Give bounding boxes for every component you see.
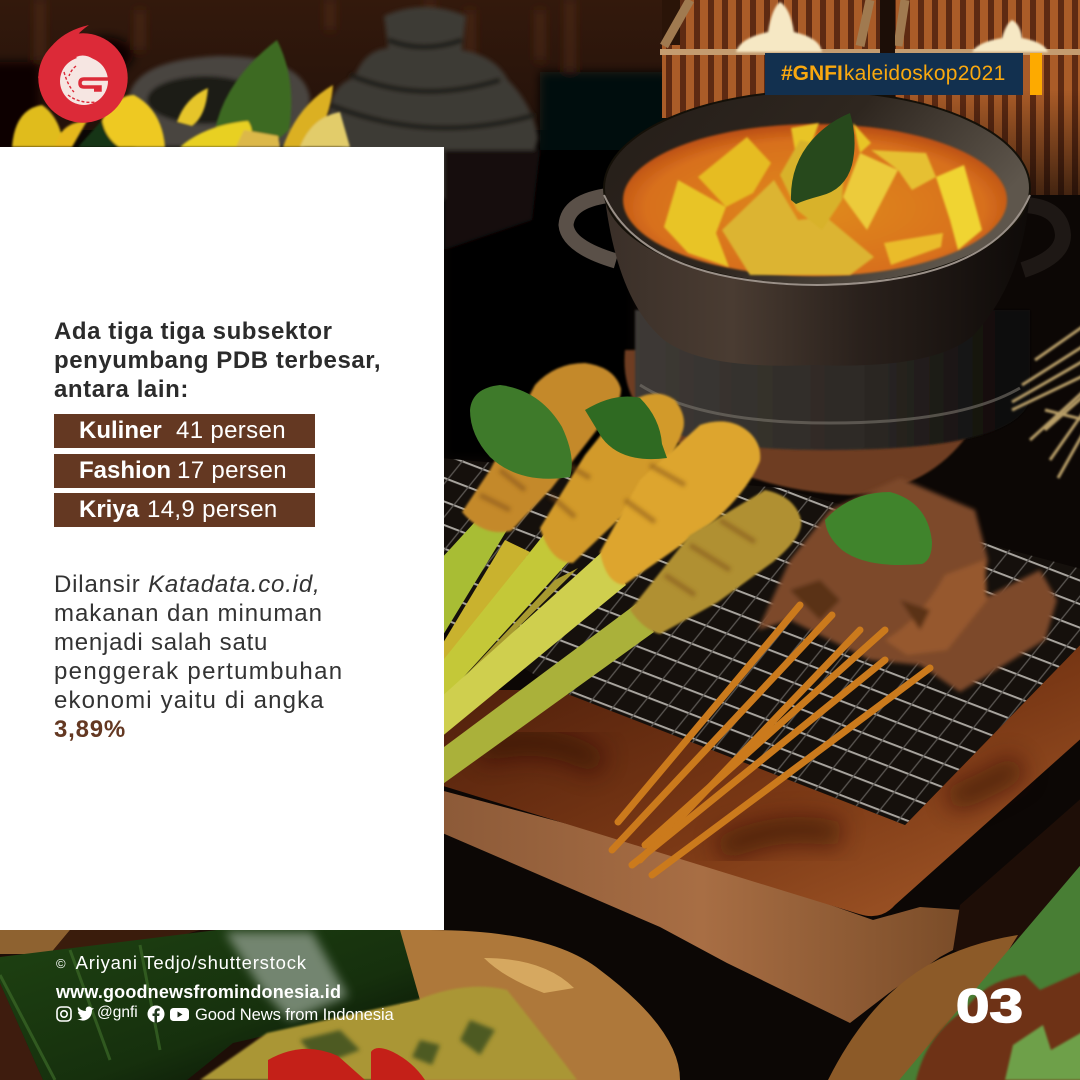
hashtag label	[765, 53, 1023, 95]
social name: Good News from Indonesia	[195, 1005, 394, 1024]
icon: twitter	[77, 1006, 94, 1021]
curry	[623, 124, 1007, 276]
wood slice under burner	[624, 350, 980, 495]
bar: Kuliner 41 persen	[54, 414, 315, 448]
pot rim	[604, 91, 1030, 285]
text block: Katadata paragraph: Dilansir Katadata.co.id,	[54, 571, 320, 598]
text block: Katadata paragraph: ekonomi yaitu di angka	[54, 687, 325, 714]
bar: Kriya 14,9 persen	[54, 493, 315, 527]
text block: Katadata paragraph: menjadi salah satu	[54, 629, 268, 656]
wire rack	[440, 458, 1080, 825]
website url: www.goodnewsfromindonesia.id	[56, 982, 341, 1002]
heading: subsektor intro	[54, 318, 381, 403]
beef satay	[758, 478, 1057, 692]
heading: subsektor intro: Ada tiga tiga subsektor	[54, 318, 332, 345]
candle baskets	[660, 0, 1080, 195]
beef satay leaf	[825, 492, 932, 565]
curry leaf	[791, 113, 855, 204]
text block: Katadata paragraph	[54, 571, 343, 743]
satay B	[540, 394, 684, 563]
satay leaf 1	[470, 385, 572, 479]
pot handles	[566, 195, 616, 261]
bar: Kuliner 41 persen: Kuliner	[79, 417, 162, 444]
photo credit: © Ariyani Tedjo/shutterstock	[56, 952, 307, 973]
hashtag label: #GNFIkaleidoskop2021	[781, 62, 1006, 85]
icon: facebook	[148, 1006, 164, 1023]
straw bundle	[1012, 325, 1080, 478]
icon: instagram	[56, 1006, 72, 1022]
bamboo skewers	[612, 605, 930, 875]
bar: Fashion 17 persen	[54, 454, 315, 488]
stone burner	[635, 310, 1030, 450]
wood board	[440, 640, 1080, 916]
tan cloth under board	[440, 790, 963, 1023]
heading: subsektor intro: antara lain:	[54, 376, 189, 403]
bar: Kriya 14,9 persen: 14,9 persen	[147, 496, 278, 523]
bar: Kriya 14,9 persen: Kriya	[79, 496, 139, 523]
bar: Kuliner 41 persen: 41 persen	[176, 417, 286, 444]
panel: white text panel	[0, 147, 444, 930]
text block: Katadata paragraph: penggerak pertumbuhan	[54, 658, 343, 685]
satay leaf 2	[585, 396, 667, 459]
bar: Fashion 17 persen: 17 persen	[177, 457, 287, 484]
dark wood right	[953, 795, 1080, 960]
bottom-left food	[0, 930, 680, 1080]
icon: youtube	[170, 1008, 189, 1021]
social handle: @gnfi	[97, 1004, 138, 1021]
flowers and leaf	[12, 40, 350, 147]
text block: Katadata paragraph: 3,89%	[54, 716, 126, 743]
satay C	[600, 421, 760, 585]
pot body	[604, 190, 1030, 366]
page number: 03	[956, 979, 1023, 1032]
satay D	[630, 490, 801, 634]
text block: Katadata paragraph: makanan dan minuman	[54, 600, 323, 627]
bottom-right bowl and leaf	[828, 860, 1080, 1080]
stone mortar and jar	[128, 7, 540, 250]
back wall	[0, 0, 680, 460]
bar: Fashion 17 persen: Fashion	[79, 457, 171, 484]
logo: GNFI red six with eagle	[38, 25, 128, 123]
lemongrass stalks	[440, 512, 654, 786]
accent bar	[1030, 53, 1042, 95]
satay A	[462, 363, 621, 532]
potato chunks	[664, 123, 982, 275]
heading: subsektor intro: penyumbang PDB terbesar,	[54, 347, 381, 374]
